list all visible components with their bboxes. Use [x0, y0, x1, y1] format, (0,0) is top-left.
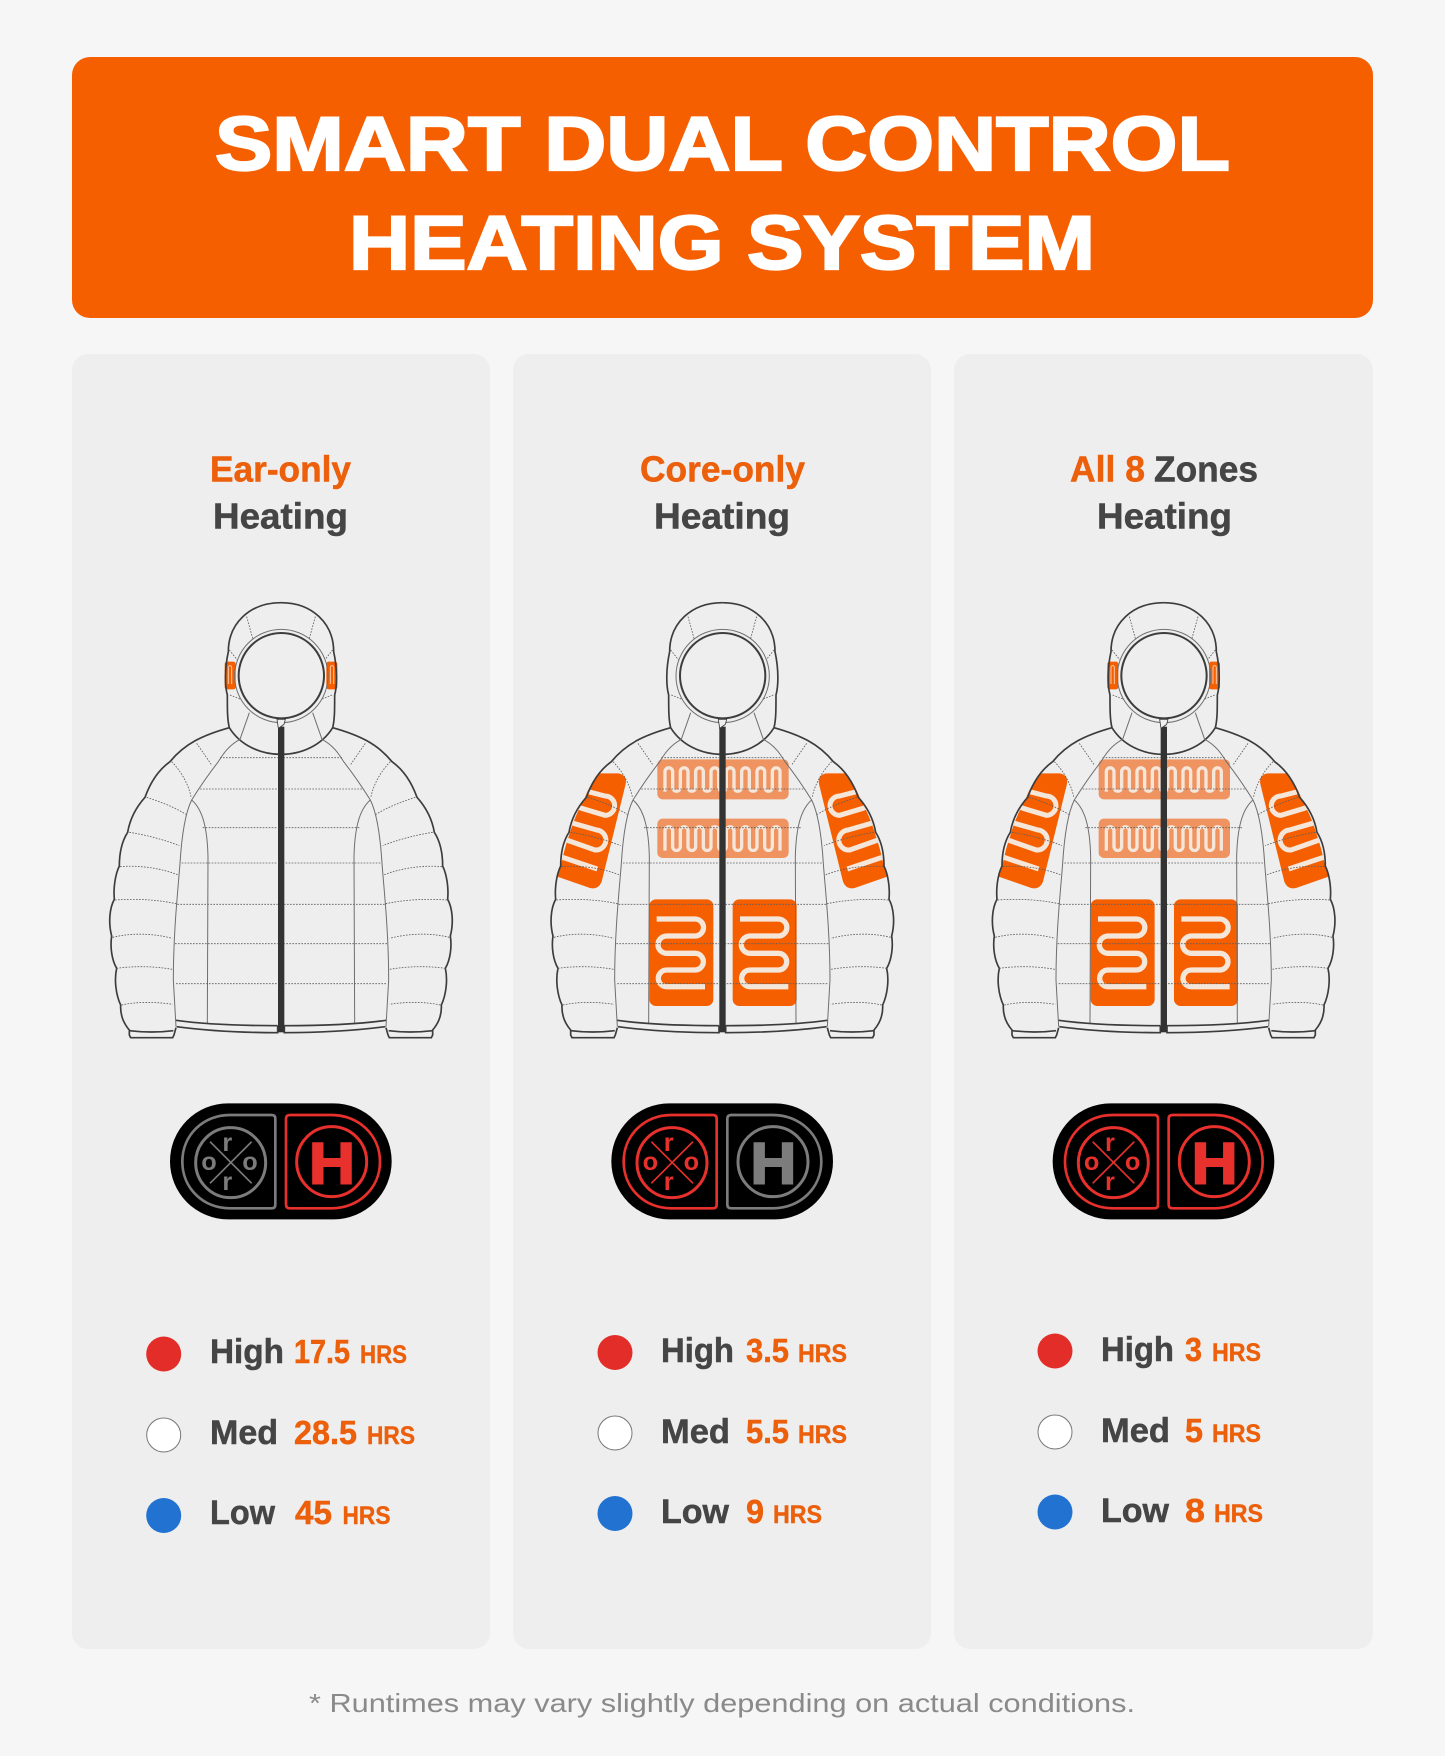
control button: both on: o — [1084, 1148, 1099, 1176]
control button: core on, heat off: H — [750, 1131, 796, 1196]
runtimes: core-only: High — [661, 1332, 734, 1370]
control button: heat on, core off: o — [242, 1148, 258, 1176]
heading: ear-only heating: Heating — [213, 496, 348, 536]
footnote: * Runtimes may vary slightly depending on actual conditions. — [309, 1688, 1135, 1718]
runtimes: all 8 zones: Low — [1101, 1492, 1170, 1530]
heading: all 8 zones heating: All 8 — [1070, 448, 1145, 490]
runtimes: ear-only: High — [210, 1333, 284, 1371]
control button: both on: H — [1192, 1131, 1238, 1196]
runtimes: ear-only — [146, 1333, 415, 1533]
heading: core-only heating: Heating — [654, 496, 790, 536]
runtimes: core-only: 9 — [746, 1493, 764, 1530]
control button: core on, heat off: r — [664, 1168, 674, 1196]
panel: all 8 zones heating — [954, 354, 1373, 1649]
heading: core-only heating: Core-only — [640, 448, 805, 490]
runtimes: ear-only: Low — [210, 1494, 276, 1532]
heading: all 8 zones heating — [1070, 448, 1258, 536]
runtimes: core-only: Med — [661, 1413, 730, 1451]
control button: heat on, core off: H — [309, 1131, 355, 1196]
control button: both on: o — [1125, 1148, 1140, 1176]
control button: both on: r — [1105, 1168, 1115, 1196]
runtimes: core-only: 5.5 — [746, 1413, 789, 1450]
control button: core on, heat off: r — [664, 1129, 674, 1157]
heading: ear-only heating: Ear-only — [210, 448, 351, 490]
runtimes: core-only: Low — [661, 1493, 730, 1531]
runtimes: core-only: HRS — [798, 1340, 847, 1368]
runtimes: core-only: 3.5 — [746, 1332, 789, 1369]
runtimes: ear-only: HRS — [360, 1341, 407, 1369]
control button: heat on, core off: r — [222, 1129, 232, 1157]
runtimes: core-only: HRS — [798, 1421, 847, 1449]
runtimes: all 8 zones: 3 — [1185, 1331, 1202, 1368]
jacket with ear heating zones — [110, 603, 452, 1038]
control button: core on, heat off — [611, 1103, 833, 1219]
runtimes: all 8 zones: Med — [1101, 1412, 1170, 1450]
control button: heat on, core off — [170, 1103, 392, 1219]
runtimes: ear-only: 28.5 — [294, 1414, 357, 1451]
runtimes: core-only: HRS — [773, 1501, 822, 1529]
runtimes: ear-only: 45 — [295, 1494, 332, 1531]
runtimes: all 8 zones: 8 — [1185, 1492, 1205, 1529]
runtimes: all 8 zones: High — [1101, 1331, 1174, 1369]
heading: ear-only heating — [210, 448, 351, 536]
control button: core on, heat off: o — [684, 1148, 699, 1176]
runtimes: all 8 zones: 5 — [1185, 1412, 1203, 1449]
runtimes: all 8 zones: HRS — [1212, 1339, 1261, 1367]
control button: heat on, core off: r — [222, 1168, 232, 1196]
jacket with core heating zones — [551, 603, 894, 1038]
runtimes: all 8 zones — [1038, 1331, 1263, 1530]
runtimes: ear-only: Med — [210, 1414, 278, 1452]
runtimes: all 8 zones: HRS — [1214, 1500, 1263, 1528]
title banner — [72, 57, 1373, 318]
title line 1: SMART DUAL CONTROL — [215, 102, 1230, 187]
control button: heat on, core off: o — [201, 1148, 217, 1176]
heading: all 8 zones heating: Heating — [1097, 496, 1232, 536]
panel: core-only heating — [513, 354, 931, 1649]
control button: both on — [1053, 1103, 1274, 1219]
heading: core-only heating — [640, 448, 805, 536]
jacket with all heating zones — [992, 603, 1335, 1038]
runtimes: core-only — [598, 1332, 847, 1531]
runtimes: ear-only: 17.5 — [294, 1333, 350, 1370]
runtimes: ear-only: HRS — [367, 1422, 415, 1450]
runtimes: ear-only: HRS — [342, 1502, 390, 1530]
control button: both on: r — [1105, 1129, 1115, 1157]
heading: all 8 zones heating: Zones — [1154, 448, 1258, 490]
control button: core on, heat off: o — [643, 1148, 658, 1176]
title line 2: HEATING SYSTEM — [349, 201, 1095, 286]
panel: ear-only heating — [72, 354, 490, 1649]
runtimes: all 8 zones: HRS — [1212, 1420, 1261, 1448]
